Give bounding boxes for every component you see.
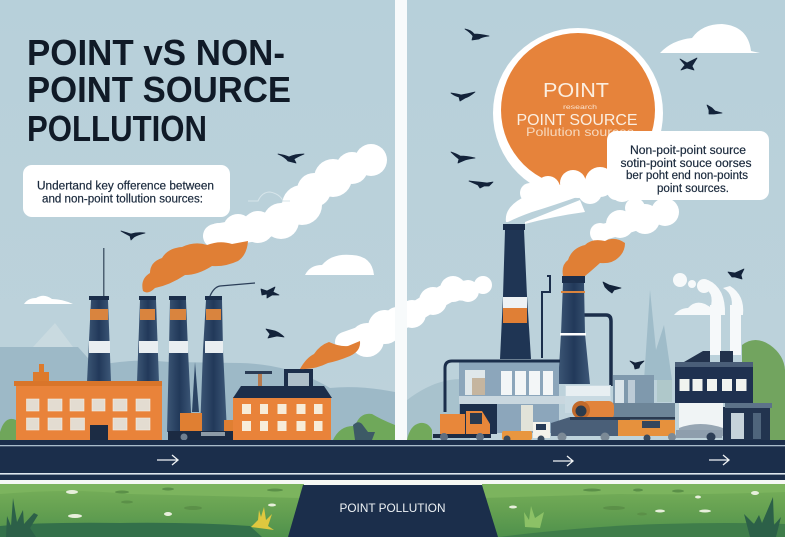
parked truck [168, 431, 234, 440]
background hills left [0, 323, 395, 440]
callout line 4: point sources. [657, 183, 729, 195]
arrow: middle road [553, 456, 573, 466]
title line 1: POINT vS NON- [27, 32, 285, 73]
orange factory building [14, 364, 162, 440]
background right [407, 290, 785, 440]
main glass building [445, 361, 567, 434]
smoke plume: right tall stack [506, 167, 634, 224]
cloud: top right [660, 24, 760, 53]
grass tuft far right [744, 497, 781, 537]
smoke plume: left white [208, 144, 387, 244]
orange building with dark roof [233, 369, 332, 440]
chimney stack 3 [167, 296, 192, 432]
sun text third line: Pollution sources [526, 125, 634, 139]
callout line 2: sotin-point souce oorses [620, 158, 752, 170]
lawn left [0, 484, 304, 537]
curved side pipe [582, 315, 611, 386]
title [27, 32, 291, 149]
callout line 3: ber poht end non-points [626, 170, 748, 182]
chimney stack 1 [87, 248, 111, 382]
distant grey building [613, 375, 675, 420]
chimney stack 2 [137, 296, 159, 382]
right callout [607, 131, 769, 200]
grass specks [115, 488, 283, 510]
sun heading: POINT [543, 80, 609, 102]
callout line 2: and non-point tollution sources: [42, 194, 203, 206]
lawn right [482, 484, 785, 537]
short chimney [558, 276, 590, 384]
orange bus [615, 417, 676, 442]
flower specks [66, 490, 276, 518]
vehicle row [433, 411, 722, 442]
sun subheading: POINT SOURCE [516, 112, 638, 129]
yellow grass tuft [251, 507, 274, 530]
title line 3: POLLUTION [27, 108, 207, 149]
sun badge [493, 28, 663, 198]
cloud: left small [24, 296, 73, 304]
callout line 1: Non-poit-point source [630, 145, 746, 157]
callout line 1: Undertand key ofference between [37, 180, 214, 192]
arrow: left road [157, 455, 178, 465]
smoke plume: right short stack white [590, 198, 679, 243]
grass tuft left [6, 498, 38, 537]
light annex and orange tank [565, 385, 614, 419]
flower specks right [509, 491, 759, 512]
orange truck [433, 411, 491, 441]
chimneys with white steam [673, 273, 743, 355]
smoke plume: right orange [563, 239, 625, 276]
faint cloud outline [248, 192, 290, 201]
smoke plume: left orange [142, 241, 248, 292]
dark building [675, 351, 772, 440]
road [0, 440, 785, 485]
plate text: POINT POLLUTION [340, 503, 446, 515]
arrow: right road [709, 455, 729, 465]
small spire and service shed [180, 362, 234, 440]
dark tanker lorry [551, 417, 630, 442]
grass tuft centre right [524, 506, 544, 528]
birds [121, 29, 744, 369]
grass specks right [583, 488, 684, 516]
panel: right factory complex [433, 224, 772, 442]
centre divider [395, 0, 407, 441]
left callout [23, 165, 230, 217]
label plate: point pollution [288, 485, 498, 537]
title line 2: POINT SOURCE [27, 69, 291, 110]
panel: left factory complex [14, 248, 332, 440]
smoke plume: centre white [340, 276, 492, 357]
sun small text: research [563, 105, 597, 111]
chimney stack 4 [200, 283, 255, 432]
thin hook pipe [542, 276, 550, 358]
cloud: left middle [305, 255, 374, 275]
small white and orange van [502, 422, 550, 442]
tall chimney [500, 224, 531, 359]
grey trailer [676, 430, 722, 442]
smoke plume: centre orange [300, 341, 360, 369]
